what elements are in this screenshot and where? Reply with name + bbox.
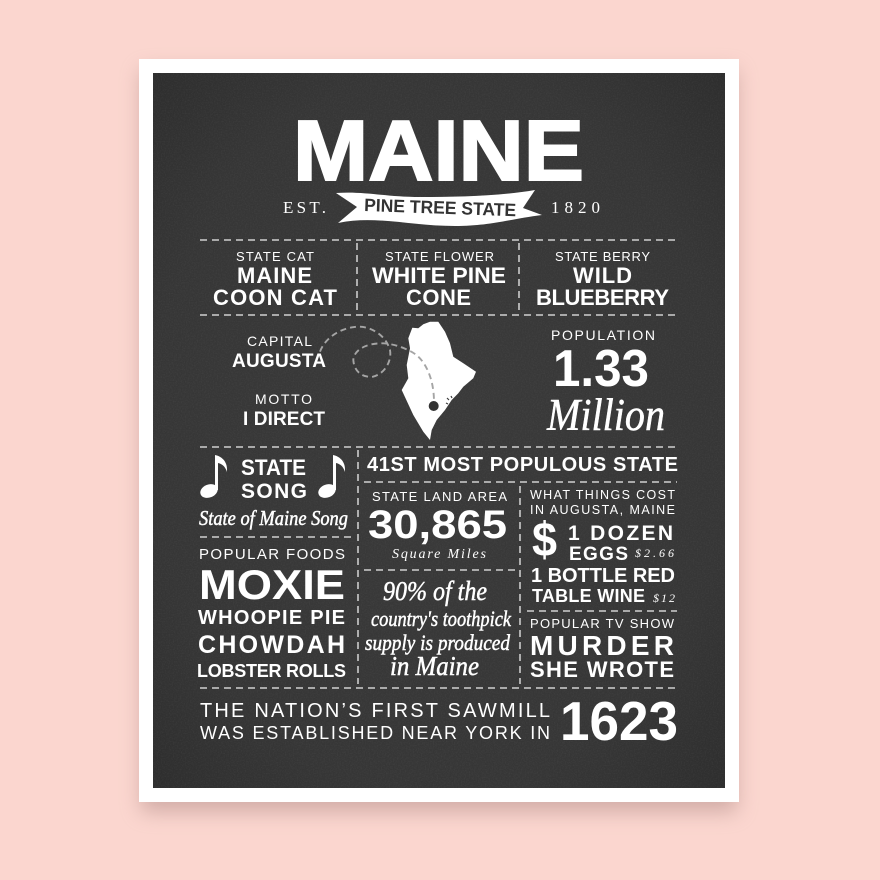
fact: state cat: COON CAT	[213, 285, 338, 310]
costs in Augusta: $12	[653, 591, 675, 605]
costs in Augusta: EGGS	[569, 544, 628, 565]
fact: state flower: STATE FLOWER	[385, 249, 494, 264]
list: popular foods: WHOOPIE PIE	[198, 607, 345, 629]
dashed dividers	[200, 240, 677, 688]
heading: state song: STATE	[241, 455, 306, 480]
costs in Augusta: TABLE WINE	[532, 586, 645, 606]
banner: pine tree state	[336, 190, 542, 226]
fact: state berry: WILD	[573, 263, 632, 288]
fact: land area: Square Miles	[392, 547, 487, 562]
map of Maine	[320, 322, 476, 440]
fact: populous rank: 41ST MOST POPULOUS STATE	[367, 454, 678, 476]
fact: state flower: CONE	[406, 285, 471, 310]
chalkboard panel	[153, 73, 725, 788]
heading: state song: SONG	[241, 480, 307, 503]
fact: state berry: BLUEBERRY	[536, 285, 669, 310]
fact: state cat: MAINE	[237, 263, 312, 288]
fact: state berry	[536, 249, 669, 310]
costs in Augusta	[530, 488, 675, 606]
costs in Augusta: 1 DOZEN	[568, 522, 673, 545]
fact: popular TV show: MURDER	[530, 630, 674, 661]
fact: population: Million	[546, 390, 665, 440]
fact: capital	[232, 333, 326, 372]
fact: population: POPULATION	[551, 327, 655, 343]
costs in Augusta: IN AUGUSTA, MAINE	[530, 503, 675, 517]
script fact: toothpicks: country's toothpick	[371, 606, 512, 631]
list: popular foods: CHOWDAH	[198, 631, 345, 659]
fact: capital: CAPITAL	[247, 333, 312, 349]
script fact: toothpicks: supply is produced	[365, 630, 511, 655]
fact: land area: 30,865	[368, 503, 507, 547]
script fact: toothpicks: in Maine	[390, 651, 479, 681]
fact: motto	[243, 391, 325, 430]
list: popular foods: POPULAR FOODS	[199, 546, 345, 563]
fact: first sawmill: THE NATION’S FIRST SAWMILL	[200, 700, 550, 722]
fact: state flower	[372, 249, 506, 310]
fact: popular TV show: POPULAR TV SHOW	[530, 616, 675, 631]
fact: motto: MOTTO	[255, 391, 312, 407]
script fact: toothpicks: 90% of the	[383, 576, 487, 606]
list: popular foods: MOXIE	[199, 561, 345, 608]
fact: capital: AUGUSTA	[232, 351, 326, 372]
fact: first sawmill: 1623	[560, 690, 678, 752]
fact: popular TV show	[530, 616, 675, 682]
list: popular foods: LOBSTER ROLLS	[197, 661, 346, 681]
chalk texture	[153, 73, 725, 788]
list: popular foods	[197, 546, 346, 681]
fact: population: 1.33	[553, 340, 649, 398]
fact: state flower: WHITE PINE	[372, 263, 506, 288]
costs in Augusta: 1 BOTTLE RED	[531, 565, 675, 587]
fact: land area: STATE LAND AREA	[372, 489, 507, 504]
icon: music note left	[198, 455, 227, 500]
fact: land area	[368, 489, 507, 562]
established year: 1820	[551, 198, 600, 217]
fact: first sawmill	[200, 690, 678, 752]
costs in Augusta: WHAT THINGS COST	[530, 488, 675, 502]
heading: state song	[199, 455, 348, 530]
icon: music note right	[316, 455, 345, 500]
established label: EST.	[283, 198, 326, 217]
banner: pine tree state: PINE TREE STATE	[364, 195, 516, 220]
script fact: toothpicks	[365, 576, 512, 681]
frame shadow	[141, 70, 737, 812]
fact: population	[546, 327, 665, 440]
costs in Augusta: $2.66	[635, 546, 674, 560]
fact: state cat	[213, 249, 338, 310]
fact: state cat: STATE CAT	[236, 249, 314, 264]
white frame	[139, 59, 739, 802]
fact: first sawmill: WAS ESTABLISHED NEAR YORK IN	[200, 723, 550, 743]
fact: state berry: STATE BERRY	[555, 249, 650, 264]
title: MAINE	[293, 104, 584, 199]
icon: dollar sign: $	[532, 514, 557, 567]
fact: popular TV show: SHE WROTE	[530, 657, 674, 682]
heading: state song: State of Maine Song	[199, 506, 348, 530]
fact: motto: I DIRECT	[243, 409, 325, 430]
